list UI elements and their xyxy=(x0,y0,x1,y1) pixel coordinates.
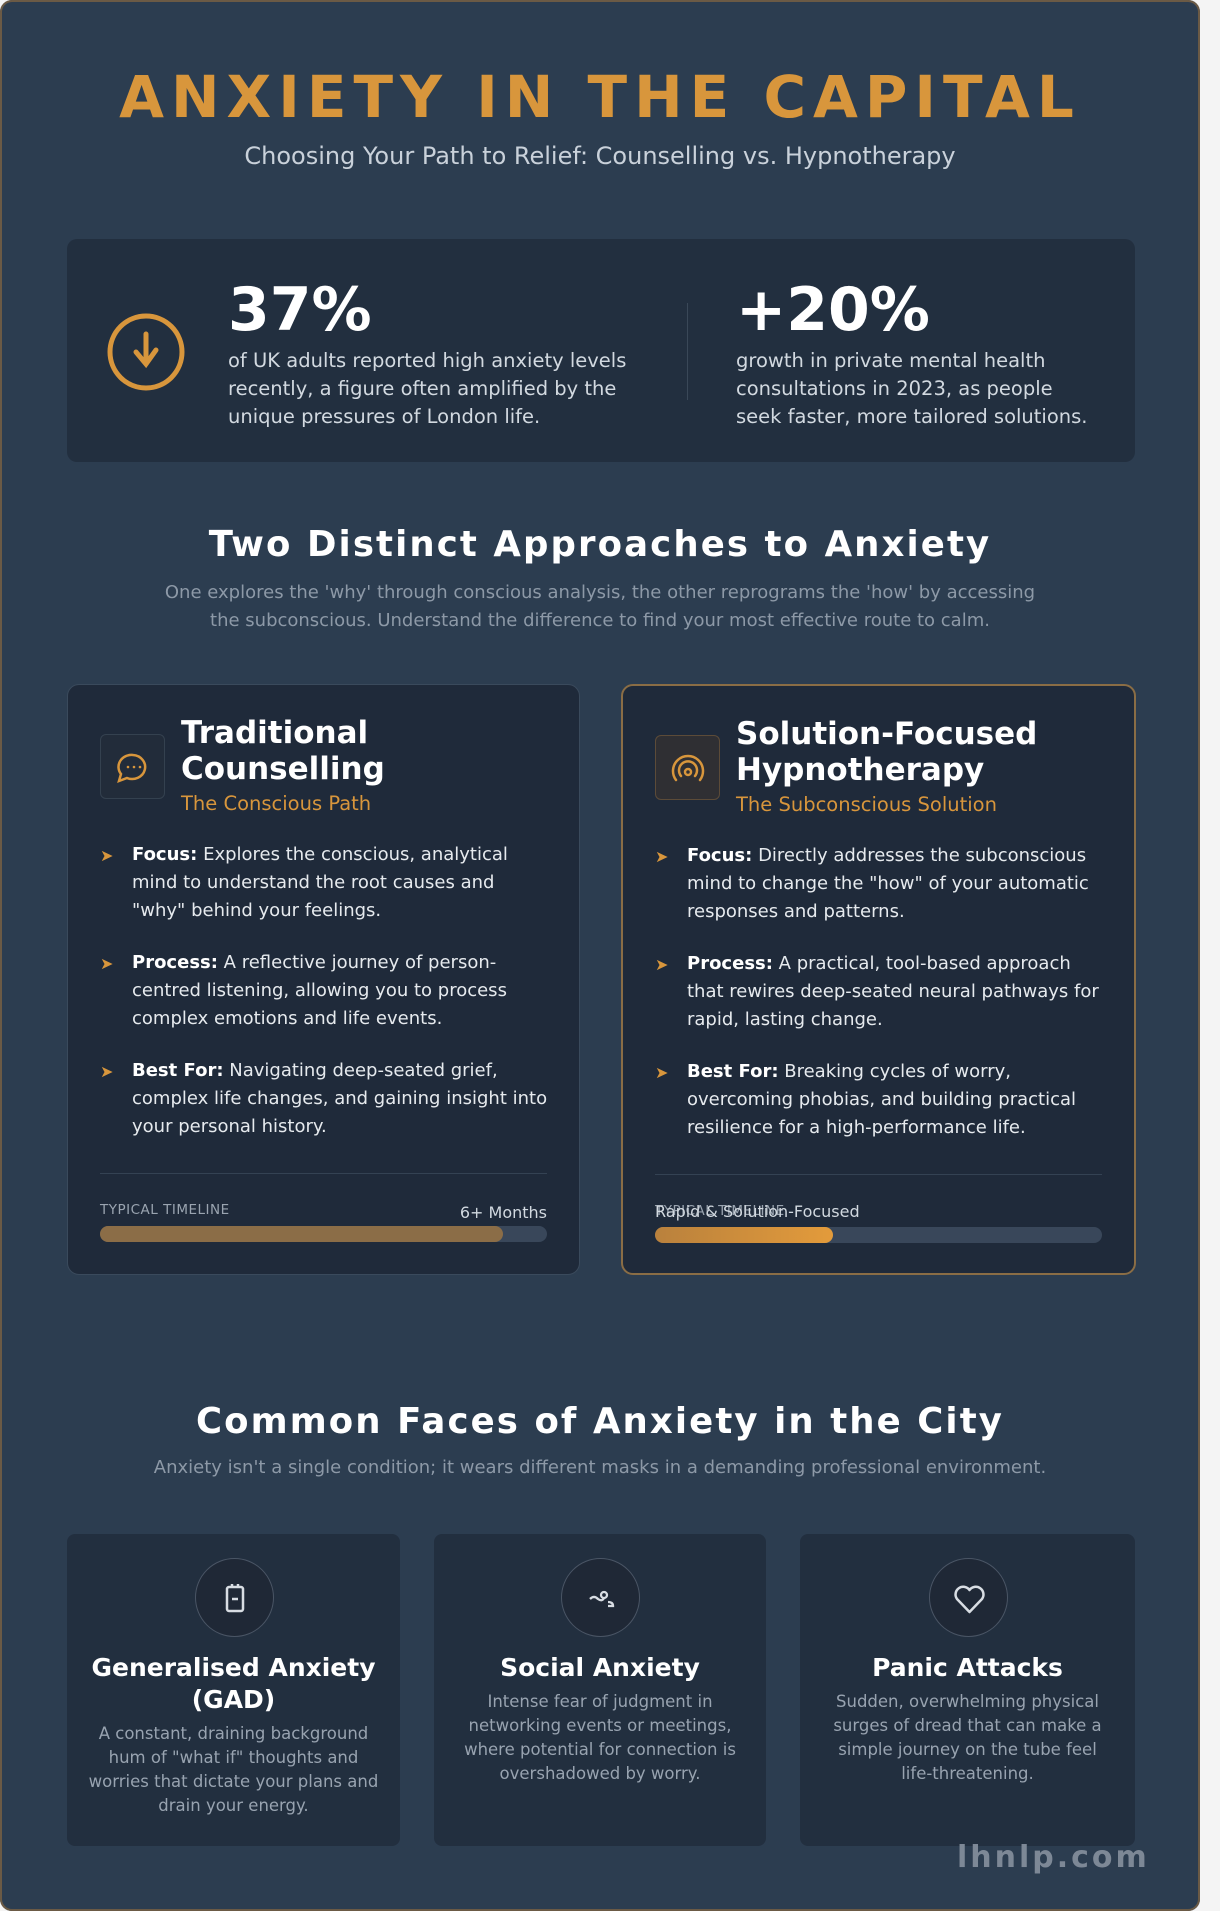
description: A constant, draining background hum of "what if" thoughts and worries that dictate your plans and drain your energy. xyxy=(89,1724,378,1815)
bullet: focus: Focus: Directly addresses the subconscious mind to change the "how" of your automatic responses and patterns. xyxy=(687,845,1089,922)
bullet: process: ➤ xyxy=(100,954,113,973)
heading: Traditional xyxy=(181,715,368,751)
title: Panic Attacks xyxy=(872,1653,1063,1682)
title: Social Anxiety xyxy=(500,1653,700,1682)
panel: panic attacks xyxy=(800,1534,1135,1846)
timeline: TYPICAL TIMELINE xyxy=(655,1203,785,1219)
bullet: focus: ➤ xyxy=(100,846,113,865)
stat: 37%: 37% xyxy=(228,275,372,345)
heading: two approaches: Two Distinct Approaches to Anxiety xyxy=(209,524,991,565)
heading xyxy=(181,715,385,787)
bullet: focus: Focus: Explores the conscious, analytical mind to understand the root causes and "why" behind your feelings. xyxy=(132,844,508,921)
heading xyxy=(736,716,1037,788)
icon: anxiety circle xyxy=(108,314,184,390)
description: Intense fear of judgment in networking events or meetings, where potential for connection is overshadowed by worry. xyxy=(464,1692,736,1783)
subtitle: Choosing Your Path to Relief: Counselling vs. Hypnotherapy xyxy=(244,142,956,170)
panel: social anxiety xyxy=(434,1534,766,1846)
icon: heart xyxy=(928,1558,1008,1637)
stat: +20% xyxy=(736,275,1088,428)
description: Sudden, overwhelming physical surges of dread that can make a simple journey on the tube feel life-threatening. xyxy=(833,1692,1102,1783)
heading: Counselling xyxy=(181,751,385,787)
panel: hypnotherapy: Rapid & Solution-Focused xyxy=(655,1202,860,1221)
text: approaches intro: One explores the 'why' through conscious analysis, the other reprograms the 'how' by accessing the subconscious. Understand the difference to find your most effective route to calm. xyxy=(165,582,1035,631)
bullet: process: Process: A reflective journey of person-centred listening, allowing you to process complex emotions and life events. xyxy=(132,952,507,1029)
icon: brain waves xyxy=(655,735,720,800)
panel: traditional counselling: 6+ Months xyxy=(460,1203,547,1222)
subheading: The Conscious Path xyxy=(181,792,371,815)
bullet: process: ➤ xyxy=(655,955,668,974)
title: Generalised Anxiety (GAD) xyxy=(91,1653,376,1714)
panel: stats xyxy=(67,239,1135,462)
title: ANXIETY IN THE CAPITAL xyxy=(119,63,1081,131)
heading: Hypnotherapy xyxy=(736,752,984,788)
bullet: best for: Best For: Breaking cycles of worry, overcoming phobias, and building practical resilience for a high-performance life. xyxy=(687,1061,1076,1138)
icon: battery xyxy=(194,1558,274,1637)
stat: +20%: growth in private mental health consultations in 2023, as people seek faster, more tailored solutions. xyxy=(736,349,1088,428)
watermark: lhnlp.com xyxy=(957,1840,1150,1875)
bullet: best for: Best For: Navigating deep-seated grief, complex life changes, and gaining insight into your personal history. xyxy=(132,1060,547,1137)
heading: common faces: Common Faces of Anxiety in the City xyxy=(196,1401,1004,1442)
timeline: TYPICAL TIMELINE xyxy=(100,1202,230,1218)
icon: chat bubble xyxy=(100,734,165,799)
panel: GAD xyxy=(67,1534,400,1846)
bullet: best for: ➤ xyxy=(100,1062,113,1081)
stat: 37% xyxy=(228,275,626,428)
icon: people xyxy=(561,1558,640,1637)
stat: +20%: +20% xyxy=(736,275,930,345)
subheading: The Subconscious Solution xyxy=(736,793,997,816)
panel: hypnotherapy xyxy=(621,684,1136,1275)
heading: Solution-Focused xyxy=(736,716,1037,752)
text: faces intro: Anxiety isn't a single condition; it wears different masks in a demanding professional environment. xyxy=(154,1457,1046,1478)
bullet: focus: ➤ xyxy=(655,847,668,866)
bullet: best for: ➤ xyxy=(655,1063,668,1082)
panel: traditional counselling xyxy=(67,684,580,1275)
stat: 37%: of UK adults reported high anxiety levels recently, a figure often amplified by the unique pressures of London life. xyxy=(228,349,626,428)
bullet: process: Process: A practical, tool-based approach that rewires deep-seated neural pathways for rapid, lasting change. xyxy=(687,953,1099,1030)
